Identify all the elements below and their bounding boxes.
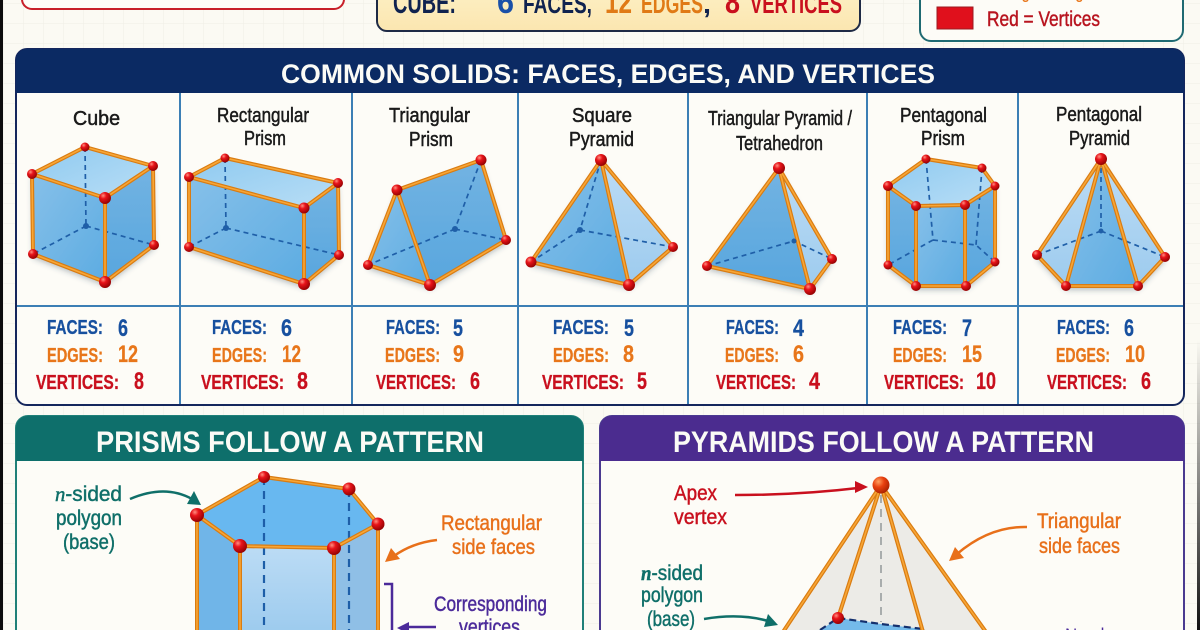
solid: triangular prism: 5: [453, 315, 463, 342]
arrow: to triangular faces: [949, 527, 1027, 561]
solid: square pyramid: 5: [624, 315, 634, 342]
solid: rectangular prism: Prism: [244, 128, 286, 150]
solid: pentagonal pyramid: 6: [1124, 315, 1134, 342]
solid: pentagonal prism: FACES:: [893, 317, 947, 339]
solid: cube: 8: [134, 368, 144, 395]
solid: pentagonal pyramid: Pyramid: [1069, 128, 1130, 150]
solid: triangular pyramid: VERTICES:: [716, 372, 796, 394]
solid: pentagonal pyramid: EDGES:: [1056, 345, 1110, 367]
solid: pentagonal pyramid: VERTICES:: [1047, 372, 1127, 394]
label: n-sided polygon base: polygon: [641, 584, 703, 607]
solid: triangular prism: EDGES:: [385, 345, 440, 367]
solid: cube: Cube: [73, 108, 120, 130]
solid: pentagonal pyramid: 10: [1125, 341, 1145, 368]
solid: pentagonal prism: 15: [962, 341, 982, 368]
solid: triangular pyramid: [702, 108, 852, 395]
bracket: corresponding vertices: [384, 584, 392, 630]
label: n-sided polygon base: n-sided: [55, 482, 122, 506]
solid: triangular pyramid: 4: [793, 315, 805, 342]
arrow: to side faces: [385, 540, 437, 562]
label: rectangular side faces: Rectangular: [441, 512, 542, 535]
solid: cube: FACES:: [47, 317, 103, 339]
solid: cube: 12: [118, 341, 138, 368]
arrow: to base: [704, 614, 778, 627]
legend: Red = Vertices: [987, 8, 1100, 31]
solid: triangular pyramid: 4: [809, 368, 821, 395]
solid: square pyramid: FACES:: [553, 317, 609, 339]
solid: pentagonal prism: VERTICES:: [884, 372, 964, 394]
solid: cube: 6: [118, 315, 128, 342]
solid: square pyramid: Square: [572, 105, 632, 127]
arrow: to bracket: [397, 622, 436, 630]
solid: rectangular prism: 8: [297, 368, 308, 395]
solid: triangular prism: 6: [470, 368, 480, 395]
label: apex vertex: [674, 482, 727, 529]
solid: rectangular prism: EDGES:: [212, 345, 267, 367]
label: apex vertex: vertex: [674, 506, 727, 529]
solid: pentagonal prism: EDGES:: [893, 345, 947, 367]
solid: cube: [27, 108, 159, 395]
solid: square pyramid: VERTICES:: [542, 372, 624, 394]
solid: triangular pyramid: FACES:: [726, 317, 779, 339]
solid: triangular prism: FACES:: [386, 317, 440, 339]
arrow: to apex: [735, 481, 868, 495]
solid: pentagonal prism: 10: [976, 368, 996, 395]
panel: pyramids follow a pattern: [600, 416, 1184, 630]
solid: square pyramid: 5: [637, 368, 647, 395]
callout: cube summary: [377, 0, 860, 31]
panel: prisms follow a pattern: [16, 416, 583, 630]
solid: square pyramid: 8: [623, 341, 634, 368]
solid: rectangular prism: [184, 105, 344, 395]
label: corresponding vertices: [434, 593, 547, 630]
solid: triangular pyramid: EDGES:: [725, 345, 779, 367]
label: rectangular side faces: [441, 512, 542, 559]
solid: triangular pyramid: 6: [793, 341, 804, 368]
solid: rectangular prism: Rectangular: [217, 105, 309, 127]
solid: triangular prism: VERTICES:: [376, 372, 456, 394]
solid: rectangular prism: 6: [281, 315, 292, 342]
solid: square pyramid: Pyramid: [569, 129, 634, 151]
solid: rectangular prism: VERTICES:: [201, 372, 284, 394]
label: n-sided polygon base: polygon: [56, 507, 122, 530]
solid: pentagonal prism: 7: [962, 315, 972, 342]
label: corresponding vertices: Corresponding: [434, 593, 547, 616]
solid: rectangular prism: 12: [282, 341, 301, 368]
solid: rectangular prism: FACES:: [212, 317, 267, 339]
solid: pentagonal pyramid: [1032, 104, 1170, 395]
label: triangular side faces: [1037, 510, 1121, 558]
label: rectangular side faces: side faces: [452, 536, 535, 559]
label: triangular side faces: Triangular: [1037, 510, 1121, 533]
solid: triangular prism: Prism: [409, 129, 453, 151]
legend: [920, 0, 1183, 41]
heading: common solids: COMMON SOLIDS: FACES, EDGES, AND VERTICES: [281, 59, 935, 89]
solid: triangular prism: Triangular: [389, 105, 470, 127]
label: n-sided polygon base: [55, 482, 122, 554]
label: triangular side faces: side faces: [1039, 535, 1120, 558]
solid: square pyramid: [526, 105, 678, 395]
diagram: large prism: [190, 471, 384, 630]
panel: common solids: [16, 49, 1184, 405]
solid: pentagonal pyramid: Pentagonal: [1056, 104, 1142, 126]
heading: prisms: PRISMS FOLLOW A PATTERN: [96, 426, 484, 459]
solid: triangular prism: [363, 105, 511, 395]
solid: pentagonal prism: Prism: [921, 128, 965, 150]
callout: red definition box: [22, 0, 344, 9]
arrow: to polygon base: [130, 491, 201, 505]
diagram: large pyramid: [783, 476, 986, 630]
solid: triangular pyramid: Triangular Pyramid /: [708, 108, 852, 130]
label: apex vertex: Apex: [674, 482, 717, 505]
label: n-sided polygon base: [641, 561, 703, 630]
label: n-sided polygon base: (base): [63, 531, 115, 554]
solid: pentagonal pyramid: FACES:: [1057, 317, 1110, 339]
solid: pentagonal prism: Pentagonal: [900, 105, 987, 127]
heading: pyramids: PYRAMIDS FOLLOW A PATTERN: [673, 426, 1094, 459]
label: n-sided polygon base: n-sided: [641, 561, 703, 585]
solid: cube: VERTICES:: [36, 372, 119, 394]
solid: cube: EDGES:: [47, 345, 103, 367]
solid: triangular prism: 9: [453, 341, 464, 368]
solid: triangular pyramid: Tetrahedron: [736, 133, 823, 155]
solid: square pyramid: EDGES:: [553, 345, 609, 367]
solid: pentagonal pyramid: 6: [1141, 368, 1151, 395]
solid: pentagonal prism: [883, 105, 1000, 395]
